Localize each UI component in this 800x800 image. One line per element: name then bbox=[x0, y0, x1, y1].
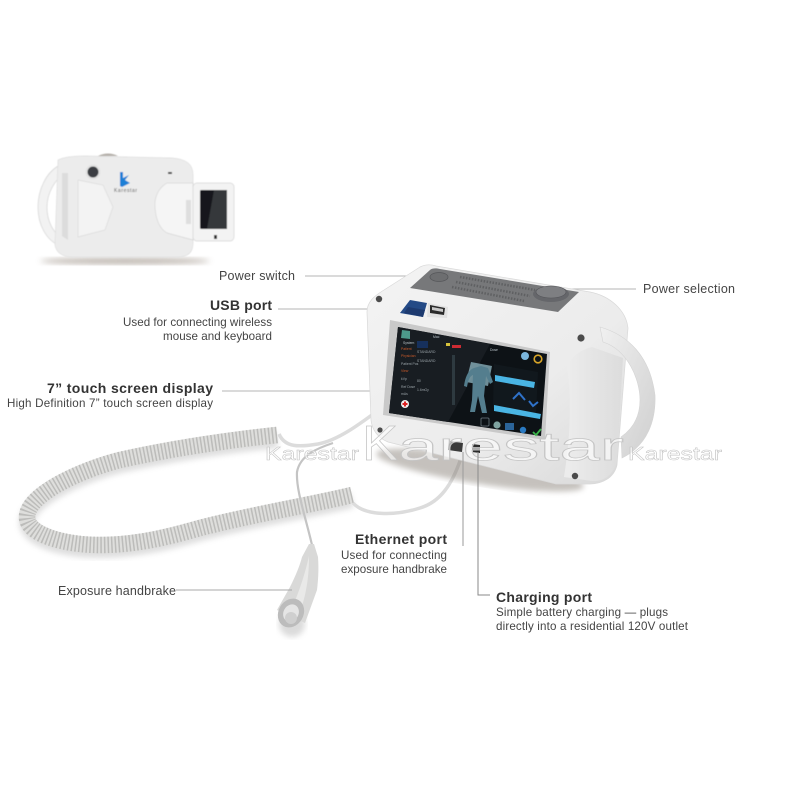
charging port callout bbox=[478, 452, 689, 633]
touch screen callout bbox=[7, 380, 396, 410]
USB module bbox=[400, 300, 448, 318]
body bbox=[367, 265, 628, 484]
leader line: power switch bbox=[305, 275, 415, 277]
left menu bbox=[401, 347, 436, 396]
small device photo bbox=[38, 154, 234, 264]
watermark: large arestar: arestar bbox=[398, 425, 624, 469]
screen bezel bbox=[383, 320, 550, 440]
left menu: Ref Dose bbox=[401, 385, 415, 389]
left menu: Patient Pos bbox=[401, 362, 419, 366]
left menu: STANDARD bbox=[417, 359, 436, 363]
touch screen: Mac bbox=[433, 335, 440, 339]
settings and power icons bbox=[521, 352, 529, 360]
left menu: 80 bbox=[417, 379, 421, 383]
leader line: USB port bbox=[278, 308, 402, 310]
cable links to device bbox=[279, 406, 461, 545]
top left button bbox=[430, 272, 448, 282]
watermark: right Karestar: Karestar bbox=[628, 444, 722, 464]
shadow bbox=[374, 440, 586, 500]
leader line: power selection bbox=[560, 288, 636, 290]
description: charging line 2: directly into a residential 120V outlet bbox=[496, 620, 689, 633]
left menu: Patient bbox=[401, 347, 412, 351]
red cross button bbox=[401, 400, 409, 408]
handle bbox=[600, 327, 655, 458]
main device bbox=[367, 265, 655, 500]
label: handbrake: Exposure handbrake bbox=[58, 584, 176, 598]
screen top bar bbox=[401, 330, 410, 339]
touch screen bbox=[389, 327, 547, 436]
touch screen: System bbox=[403, 341, 414, 345]
handbrake bbox=[273, 544, 318, 637]
label: power switch: Power switch bbox=[219, 269, 295, 283]
description: USB port: Used for connecting wireless bbox=[123, 316, 272, 329]
left menu: kVp bbox=[401, 377, 407, 381]
left menu: STANDARD bbox=[417, 350, 436, 354]
up and down arrows bbox=[513, 393, 525, 400]
touch screen: Dose bbox=[490, 348, 498, 352]
watermark: large K: K bbox=[362, 417, 398, 471]
heading: touch screen: 7” touch screen display bbox=[47, 380, 213, 396]
heading: USB port: USB port bbox=[210, 297, 272, 313]
ports bbox=[448, 441, 480, 453]
screw holes bbox=[376, 296, 585, 479]
left menu: View bbox=[401, 369, 409, 373]
side panel bbox=[564, 347, 623, 481]
USB port callout bbox=[123, 297, 402, 343]
leader line: ethernet bbox=[462, 452, 464, 546]
description: USB port line 2: mouse and keyboard bbox=[163, 330, 272, 343]
watermark bbox=[265, 417, 722, 471]
small device photo: Karestar bbox=[114, 188, 138, 194]
description: touch screen: High Definition 7” touch screen display bbox=[7, 397, 213, 410]
left menu: mAs bbox=[401, 392, 408, 396]
label: power selection: Power selection bbox=[643, 282, 735, 296]
left menu: Physician bbox=[401, 354, 416, 358]
right settings panel bbox=[493, 364, 538, 415]
left menu: 1.6mGy bbox=[417, 388, 429, 392]
leader line: handbrake bbox=[176, 589, 292, 591]
description: ethernet line 2: exposure handbrake bbox=[341, 563, 447, 576]
bottom toolbar icons bbox=[481, 418, 489, 426]
watermark: left Karestar: Karestar bbox=[265, 444, 359, 464]
leader line: charging bbox=[478, 452, 490, 595]
ethernet port callout bbox=[341, 452, 463, 576]
coiled cable bbox=[27, 435, 352, 550]
speaker dots bbox=[452, 277, 535, 301]
description: charging: Simple battery charging — plugs bbox=[496, 606, 668, 619]
description: ethernet: Used for connecting bbox=[341, 549, 447, 562]
heading: ethernet: Ethernet port bbox=[355, 531, 447, 547]
top grey panel bbox=[410, 268, 579, 312]
heading: charging: Charging port bbox=[496, 589, 592, 605]
leader line: touch screen bbox=[222, 390, 396, 392]
power selection knob bbox=[533, 286, 569, 302]
body scan figure bbox=[466, 362, 492, 386]
